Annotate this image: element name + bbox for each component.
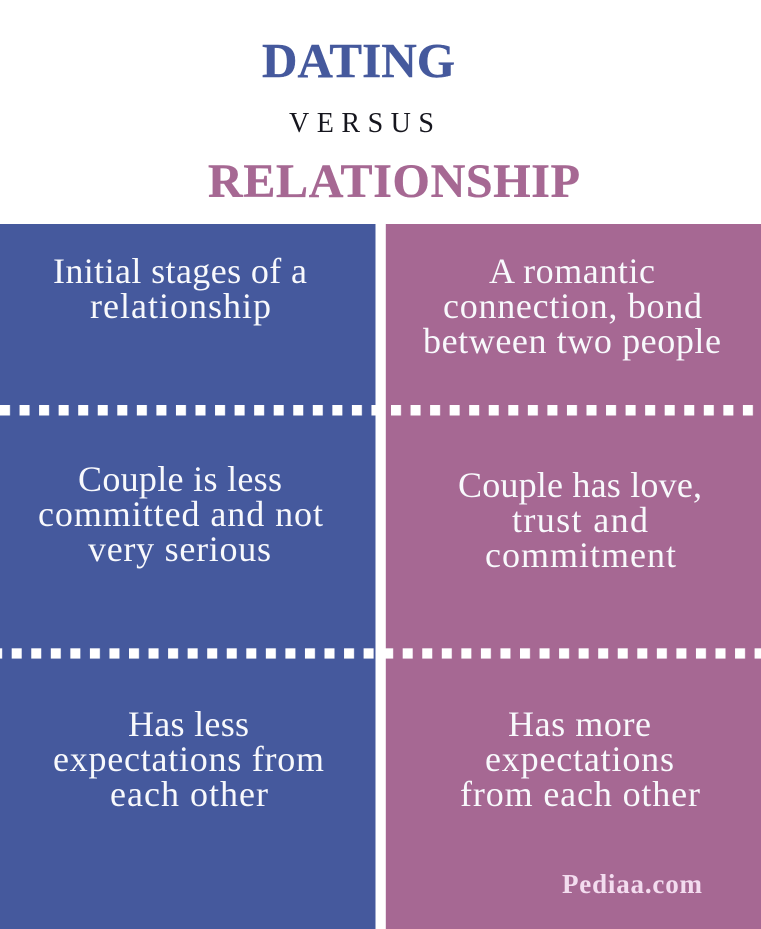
text: relationship definition: between two people [423,321,721,361]
text: relationship expectations: Has more [508,704,651,744]
text: relationship expectations: from each other [460,774,700,814]
text: dating definition [53,251,307,326]
text: dating commitment [38,459,323,569]
title: relationship: RELATIONSHIP [208,155,580,208]
panel: relationship column [386,224,761,929]
logo: Pediaa.com: Pediaa.com [562,869,702,899]
text: dating commitment: committed and not [38,494,323,534]
title: dating: DATING [262,33,455,88]
text: dating commitment: very serious [88,529,271,569]
text: relationship definition: connection, bond [443,286,702,326]
panel: dating column [0,224,376,929]
text: dating expectations: each other [110,774,268,814]
text: dating definition: relationship [90,286,271,326]
text: dating commitment: Couple is less [78,459,282,499]
text: relationship expectations: expectations [485,739,674,779]
text: relationship commitment: commitment [485,535,676,575]
text: relationship commitment: trust and [512,500,648,540]
text: dating expectations: expectations from [53,739,324,779]
text: relationship definition: A romantic [489,251,655,291]
text: dating expectations: Has less [128,704,249,744]
text: relationship definition [423,251,721,361]
text: dating definition: Initial stages of a [53,251,307,291]
text: relationship expectations [460,704,700,814]
text: relationship commitment: Couple has love, [458,465,702,505]
text: relationship commitment [458,465,702,575]
subtitle: versus: VERSUS [289,108,434,139]
text: dating expectations [53,704,324,814]
